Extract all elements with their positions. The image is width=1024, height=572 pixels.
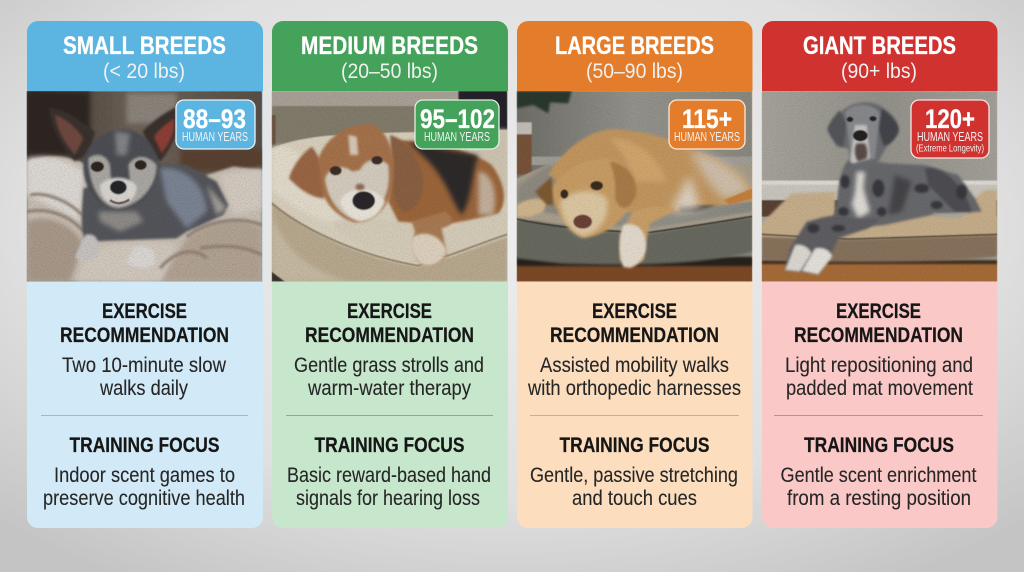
header: large breeds	[517, 21, 753, 91]
training focus: from a resting position	[787, 486, 971, 510]
ears	[49, 108, 95, 162]
training focus: TRAINING FOCUS	[70, 433, 220, 457]
badge: 115+ human years: 115+	[682, 104, 732, 134]
header: giant breeds: (90+ lbs)	[841, 59, 917, 83]
panel: giant breeds	[762, 21, 998, 528]
exercise recommendation: Two 10-minute slow	[62, 353, 226, 377]
exercise recommendation: EXERCISE	[592, 299, 677, 323]
training focus: signals for hearing loss	[296, 486, 480, 510]
training focus: Gentle scent enrichment	[780, 463, 977, 487]
exercise recommendation: warm-water therapy	[307, 376, 471, 400]
badge: 120+ human years, extreme longevity	[911, 100, 989, 158]
dog body	[388, 140, 504, 225]
exercise recommendation: Assisted mobility walks	[540, 353, 729, 377]
training focus: Basic reward-based hand	[287, 463, 491, 487]
dog body	[832, 158, 982, 228]
header: medium breeds: (20–50 lbs)	[341, 59, 438, 83]
exercise recommendation: RECOMMENDATION	[60, 323, 229, 347]
photo: senior great dane on mat	[762, 91, 997, 282]
photo: senior chihuahua on blanket	[27, 91, 263, 282]
badge: 88–93 human years	[176, 100, 255, 149]
training focus	[43, 433, 245, 510]
ears	[289, 147, 326, 198]
training focus	[780, 433, 977, 510]
exercise recommendation: padded mat movement	[786, 376, 973, 400]
exercise recommendation: RECOMMENDATION	[794, 323, 963, 347]
badge: 115+ human years: HUMAN YEARS	[674, 130, 740, 144]
head	[83, 129, 158, 210]
training focus: Indoor scent games to	[54, 463, 235, 487]
badge: 88–93 human years: HUMAN YEARS	[182, 130, 248, 144]
header: small breeds: (< 20 lbs)	[103, 59, 185, 83]
header: medium breeds	[272, 21, 508, 91]
head	[318, 124, 394, 222]
exercise recommendation: EXERCISE	[836, 299, 921, 323]
exercise recommendation: Light repositioning and	[785, 353, 973, 377]
header: giant breeds	[762, 21, 998, 91]
badge: 88–93 human years: 88–93	[183, 104, 246, 134]
training focus: TRAINING FOCUS	[314, 433, 464, 457]
training focus: and touch cues	[572, 486, 697, 510]
training focus: TRAINING FOCUS	[560, 433, 710, 457]
exercise recommendation: RECOMMENDATION	[550, 323, 719, 347]
head	[828, 102, 899, 168]
badge: 95–102 human years: HUMAN YEARS	[424, 130, 490, 144]
badge: 95–102 human years	[415, 100, 499, 149]
training focus	[287, 433, 491, 510]
photo: senior beagle on cushion	[272, 91, 507, 282]
panel: medium breeds	[272, 21, 508, 528]
badge: 120+ human years, extreme longevity: 120+	[925, 104, 975, 134]
badge: 120+ human years, extreme longevity: HUMAN YEARS	[917, 130, 983, 144]
head	[552, 180, 628, 239]
exercise recommendation	[785, 299, 973, 400]
header: large breeds: (50–90 lbs)	[586, 59, 683, 83]
training focus	[530, 433, 738, 510]
legs	[517, 199, 547, 217]
exercise recommendation	[60, 299, 229, 400]
header: medium breeds: MEDIUM BREEDS	[301, 32, 478, 60]
training focus: TRAINING FOCUS	[804, 433, 954, 457]
photo: senior labrador on grey bed	[517, 91, 752, 282]
exercise recommendation: with orthopedic harnesses	[527, 376, 741, 400]
badge: 115+ human years	[669, 100, 745, 149]
training focus: preserve cognitive health	[43, 486, 245, 510]
panel: small breeds	[27, 21, 263, 528]
header: small breeds: SMALL BREEDS	[63, 32, 226, 60]
training focus: Gentle, passive stretching	[530, 463, 738, 487]
badge: 95–102 human years: 95–102	[420, 104, 495, 134]
exercise recommendation: walks daily	[99, 376, 188, 400]
dog body	[82, 163, 228, 242]
exercise recommendation: EXERCISE	[347, 299, 432, 323]
exercise recommendation: RECOMMENDATION	[305, 323, 474, 347]
exercise recommendation: Gentle grass strolls and	[294, 353, 484, 377]
badge: 120+ human years, extreme longevity: (Extreme Longevity)	[916, 144, 984, 154]
forelegs	[785, 215, 882, 273]
header: small breeds	[27, 21, 263, 91]
exercise recommendation	[294, 299, 484, 400]
header: giant breeds: GIANT BREEDS	[803, 32, 956, 60]
header: large breeds: LARGE BREEDS	[555, 32, 714, 60]
exercise recommendation: EXERCISE	[102, 299, 187, 323]
exercise recommendation	[527, 299, 741, 400]
panel: large breeds	[517, 21, 753, 528]
dog body	[548, 129, 752, 222]
